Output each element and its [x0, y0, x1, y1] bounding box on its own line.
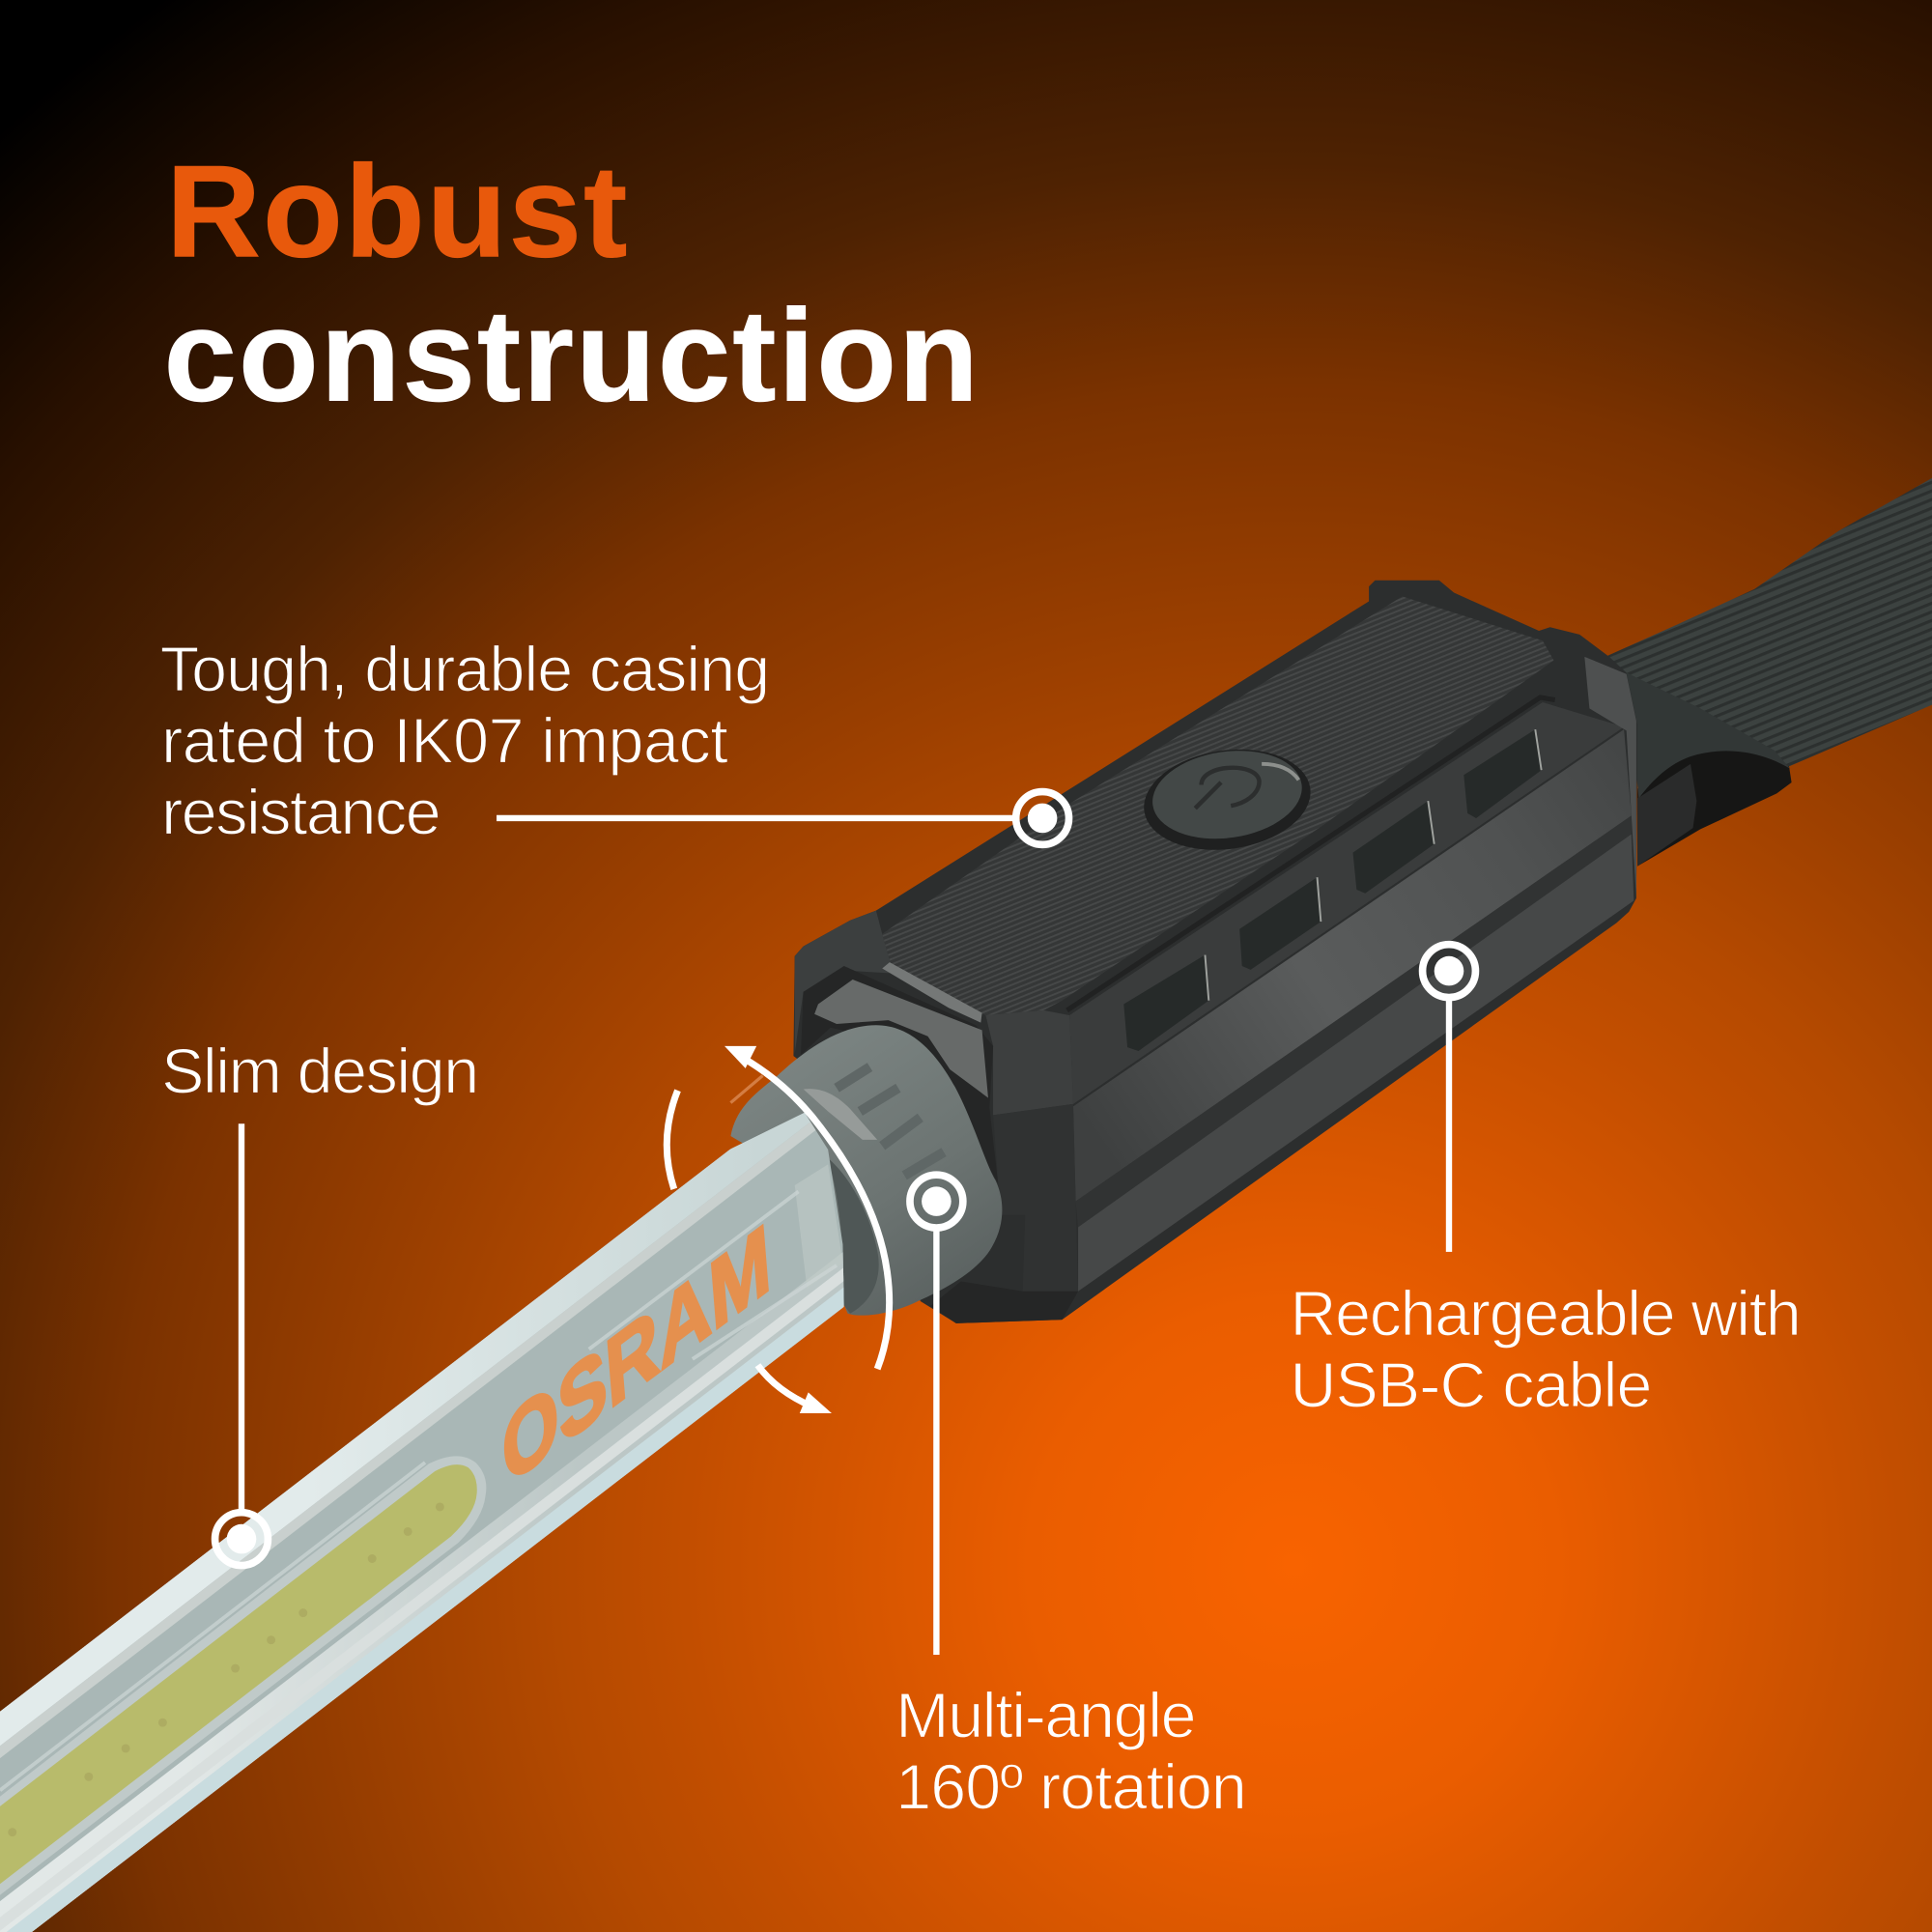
side window 2 [1239, 877, 1321, 970]
casing marker [1016, 792, 1069, 844]
band upper inner [0, 1122, 815, 1758]
slim design text: Slim design [161, 1036, 479, 1107]
side window 1 [1123, 955, 1208, 1051]
top face chip [882, 962, 982, 1023]
reflection streak [730, 1076, 763, 1103]
side lower panel [1078, 835, 1634, 1292]
rotation text: 160º rotation [895, 1751, 1247, 1823]
casing base notch [930, 1282, 1078, 1323]
LED dots [8, 1502, 444, 1836]
casing leader line [497, 815, 1014, 821]
casing text: rated to IK07 impact [161, 706, 728, 778]
collar inner shade [828, 1158, 879, 1314]
rotation marker [910, 1175, 963, 1228]
USB-C text [1290, 1279, 1802, 1422]
rotation text: Multi-angle [895, 1680, 1197, 1751]
lower side face [1073, 729, 1632, 1202]
USB-C leader line [1446, 999, 1452, 1252]
casing silhouette [793, 581, 1637, 1323]
main rotation arc [742, 1057, 890, 1369]
casing text [160, 635, 770, 849]
title line one: Robust [166, 138, 627, 284]
front bezel dark [801, 966, 998, 1182]
gray rotating collar [730, 1025, 1002, 1316]
band top edge [0, 1113, 810, 1746]
callout: rotation [895, 1175, 1247, 1823]
rotation text [895, 1680, 1247, 1823]
LED panel [0, 1464, 477, 1884]
strap bracket [1637, 764, 1696, 867]
band highlights [0, 1191, 837, 1790]
title [164, 138, 979, 429]
side dark stripe [1076, 815, 1632, 1227]
collar body [730, 1025, 1002, 1316]
strap loop interior [1637, 746, 1792, 867]
window strip [1069, 702, 1624, 1104]
LED panel surround [0, 1456, 486, 1895]
elastic webbing [1608, 478, 1932, 766]
ribbed top face [882, 596, 1553, 1015]
callout: slim design [161, 1036, 479, 1566]
strap fold [1627, 672, 1790, 799]
callout: casing [160, 635, 1069, 849]
casing front corner, upper [985, 1010, 1073, 1115]
upper arrowhead [724, 1046, 756, 1068]
callout: USB-C [1290, 945, 1802, 1422]
rotation arrows [667, 1046, 890, 1413]
side window 3 [1353, 801, 1435, 894]
elastic head strap [1608, 478, 1932, 867]
collar grip ridges [837, 1067, 944, 1176]
USB-C text: USB-C cable [1290, 1350, 1652, 1422]
window highlights [1205, 729, 1542, 1001]
side window 4 [1463, 729, 1542, 818]
rotation leader line [933, 1230, 940, 1655]
casing front corner, lower [993, 1104, 1078, 1292]
band end reflection [795, 1165, 841, 1281]
lower arrowhead [800, 1392, 832, 1413]
casing text: resistance [161, 778, 441, 849]
control unit casing [793, 581, 1637, 1323]
translucent light band [0, 1047, 863, 1932]
OSRAM logo: OSRAM [498, 1202, 774, 1508]
collar textured patch [804, 1089, 877, 1140]
band lower layers [0, 1237, 863, 1932]
slim design leader line [239, 1123, 244, 1511]
power button [1137, 739, 1317, 860]
band lower white stripe [0, 1253, 863, 1931]
USB-C text: Rechargeable with [1290, 1279, 1802, 1350]
small rotation arc [667, 1091, 678, 1189]
title line two: construction [164, 283, 979, 429]
USB-C marker [1423, 945, 1475, 998]
band bottom edge [0, 1273, 863, 1932]
casing text: Tough, durable casing [160, 635, 770, 706]
right chamfer [1584, 657, 1636, 898]
front bezel light [814, 980, 988, 1097]
band base [0, 1047, 863, 1932]
lower rotation arc [757, 1365, 813, 1407]
casing left shoulder [795, 911, 894, 1054]
ridge line [1067, 697, 1555, 1010]
slim design marker [215, 1513, 268, 1566]
